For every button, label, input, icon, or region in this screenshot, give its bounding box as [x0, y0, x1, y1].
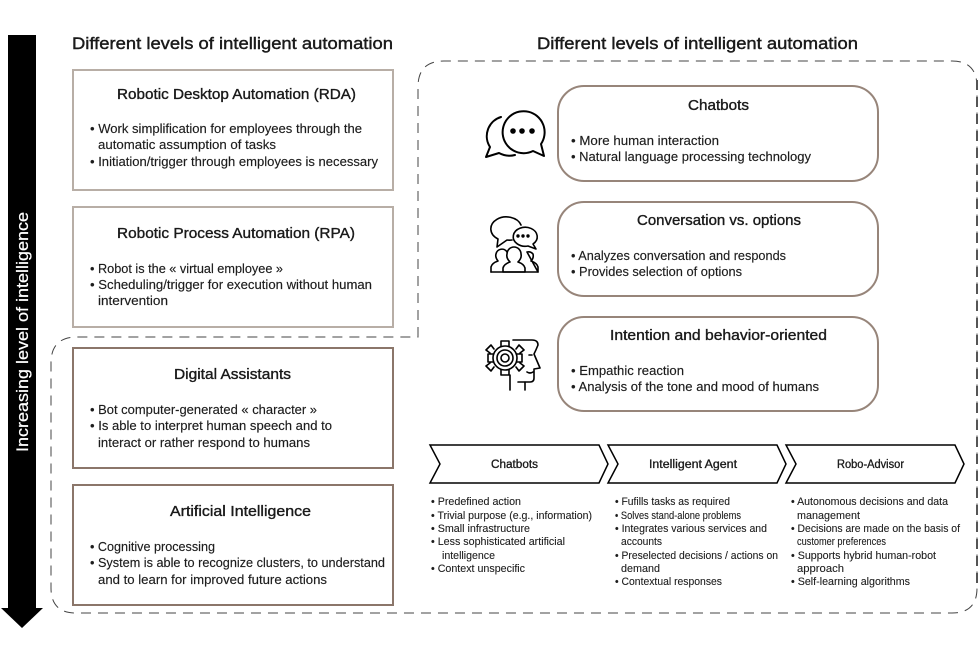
heading: right column: Different levels of intelligent automation [537, 34, 858, 53]
vertical arrow: increasing level of intelligence: Increasing level of intelligence [13, 212, 32, 452]
icon: group conversation [491, 217, 538, 272]
heading: left column: Different levels of intelligent automation [72, 34, 393, 53]
list: Intelligent Agent characteristics: • Fufills tasks as required [615, 496, 730, 508]
list: Intelligent Agent characteristics: • Preselected decisions / actions on [615, 550, 778, 562]
panel: Chatbots: • More human interaction [571, 133, 719, 148]
panel: Conversation vs. options: • Provides selection of options [571, 264, 742, 279]
panel: Digital Assistants [73, 348, 393, 468]
panel: Artificial Intelligence: and to learn for improved future actions [98, 572, 327, 587]
list: Intelligent Agent characteristics: • Solves stand-alone problems [615, 510, 742, 522]
panel: Robotic Desktop Automation: automatic assumption of tasks [98, 137, 277, 152]
list: Intelligent Agent characteristics: • Contextual responses [615, 576, 723, 588]
list: Chatbots characteristics: • Small infrastructure [431, 523, 530, 535]
list: Robo-Advisor characteristics: • Autonomous decisions and data [791, 496, 948, 508]
panel: Digital Assistants: Digital Assistants [174, 367, 291, 383]
panel: Robotic Desktop Automation: Robotic Desktop Automation (RDA) [117, 87, 356, 103]
list: Chatbots characteristics: • Less sophisticated artificial [431, 536, 565, 548]
panel: Intention and behavior-oriented: • Analysis of the tone and mood of humans [571, 379, 819, 394]
chevron: Intelligent Agent: Intelligent Agent [649, 459, 738, 471]
list: Robo-Advisor characteristics: customer preferences [797, 536, 887, 548]
panel: Conversation vs. options [558, 202, 878, 296]
panel: Chatbots [558, 86, 878, 181]
icon: chat bubbles [486, 111, 545, 157]
list: Robo-Advisor characteristics: approach [797, 563, 844, 575]
panel: Digital Assistants: • Is able to interpret human speech and to [90, 418, 332, 433]
panel: Intention and behavior-oriented: Intention and behavior-oriented [610, 328, 827, 344]
panel: Robotic Process Automation: Robotic Process Automation (RPA) [117, 226, 355, 242]
panel: Intention and behavior-oriented [558, 317, 878, 411]
panel: Artificial Intelligence: • Cognitive processing [90, 539, 215, 554]
panel: Digital Assistants: • Bot computer-generated « character » [90, 402, 317, 417]
list: Chatbots characteristics [431, 496, 592, 575]
panel: Robotic Process Automation: intervention [98, 293, 168, 308]
panel: Robotic Process Automation: • Scheduling/trigger for execution without human [90, 277, 372, 292]
chevron: Chatbots [430, 445, 608, 483]
list: Robo-Advisor characteristics: management [797, 510, 860, 522]
panel: Robotic Desktop Automation: • Work simplification for employees through the [90, 121, 362, 136]
list: Chatbots characteristics: • Context unspecific [431, 563, 526, 575]
list: Intelligent Agent characteristics: accounts [621, 536, 663, 548]
list: Intelligent Agent characteristics: • Integrates various services and [615, 523, 767, 535]
list: Chatbots characteristics: • Trivial purpose (e.g., information) [431, 510, 592, 522]
panel: Conversation vs. options: Conversation vs. options [637, 213, 801, 229]
list: Intelligent Agent characteristics: demand [621, 563, 660, 575]
panel: Chatbots: Chatbots [688, 98, 749, 114]
icon: head with gear [486, 340, 540, 390]
list: Robo-Advisor characteristics: • Self-learning algorithms [791, 576, 911, 588]
list: Chatbots characteristics: • Predefined action [431, 496, 521, 508]
chevron: Chatbots: Chatbots [491, 459, 538, 471]
list: Robo-Advisor characteristics: • Decisions are made on the basis of [791, 523, 961, 535]
chevron: Intelligent Agent [608, 445, 786, 483]
chevron: Robo-Advisor: Robo-Advisor [837, 459, 904, 471]
panel: Robotic Desktop Automation [73, 70, 393, 190]
panel: Robotic Process Automation: • Robot is the « virtual employee » [90, 261, 283, 276]
panel: Artificial Intelligence [73, 485, 393, 605]
panel: Conversation vs. options: • Analyzes conversation and responds [571, 248, 786, 263]
vertical arrow: increasing level of intelligence [1, 35, 43, 628]
panel: Artificial Intelligence: Artificial Intelligence [170, 504, 311, 520]
list: Robo-Advisor characteristics [791, 496, 961, 588]
panel: Robotic Process Automation [73, 207, 393, 327]
list: Robo-Advisor characteristics: • Supports hybrid human-robot [791, 550, 936, 562]
dashed region outline [51, 61, 977, 613]
panel: Artificial Intelligence: • System is able to recognize clusters, to understand [90, 555, 385, 570]
panel: Robotic Desktop Automation: • Initiation/trigger through employees is necessary [90, 154, 378, 169]
panel: Digital Assistants: interact or rather respond to humans [98, 435, 311, 450]
list: Chatbots characteristics: intelligence [442, 550, 495, 562]
panel: Intention and behavior-oriented: • Empathic reaction [571, 363, 684, 378]
list: Intelligent Agent characteristics [615, 496, 778, 588]
chevron: Robo-Advisor [786, 445, 964, 483]
panel: Chatbots: • Natural language processing technology [571, 149, 811, 164]
